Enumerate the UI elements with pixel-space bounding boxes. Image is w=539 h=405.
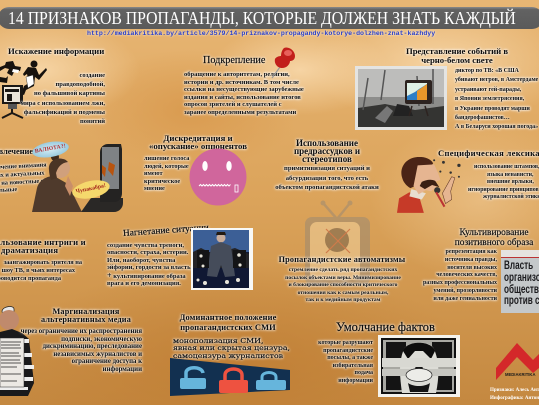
text block: которые разрушают [318, 340, 373, 346]
credits: Инфографика: Антон [490, 396, 539, 400]
logo: Mediakritika [490, 340, 539, 385]
panel: культивирование позитивного образа [420, 226, 539, 313]
title bar: 14 ПРИЗНАКОВ ПРОПАГАНДЫ, КОТОРЫЕ ДОЛЖЕН ЗНАТЬ КАЖДЫЙ [8, 8, 516, 28]
image: gagged face [378, 335, 460, 397]
text block [274, 164, 381, 192]
text block: издания и сайты, использование итогов [184, 94, 301, 101]
text block: создание чувства тревоги, [107, 242, 184, 249]
text block: источника правды, [445, 257, 497, 263]
text block [466, 162, 539, 202]
text block: опасности, страха, истерии. [107, 249, 188, 256]
heading: стереотипов [302, 154, 352, 164]
text block: пропагандистские [323, 348, 373, 354]
text block: А в Беларуси хорошая погода» [455, 124, 538, 130]
credits [490, 387, 539, 402]
heading: Специфическая лексика [438, 148, 539, 158]
heading [453, 226, 535, 248]
panel: специфическая лексика [397, 148, 539, 213]
text block: примитивизация ситуаций и [284, 165, 370, 172]
text block: диктор по ТВ: «В США [455, 68, 519, 74]
newspaper headline [504, 258, 539, 307]
panel: умолчание фактов [300, 315, 465, 405]
text block [182, 70, 306, 118]
heading: «опускание» оппонентов [149, 141, 247, 151]
text block: самоцензура журналистов [173, 352, 283, 360]
text block: человеческих качеств, [436, 272, 497, 278]
text block: умений, прозорливости [434, 288, 497, 294]
text block: создание [79, 72, 105, 79]
photo: man on dark throne [191, 228, 253, 290]
text block [142, 154, 192, 192]
photo: woman at computer [32, 144, 123, 212]
text block: так и к медийным продуктам [305, 297, 380, 303]
text block: людей, которые [144, 162, 189, 170]
heading [39, 306, 133, 326]
heading: Представление событий в [406, 46, 508, 56]
panel: пропагандистские автоматизмы [270, 250, 430, 325]
text block: носителя высоких [447, 265, 497, 271]
text block: истории и др. источникам. В том числе [184, 79, 299, 86]
text block: подписки, экономическую [61, 336, 142, 343]
icon: watermark TV with crossed brain [305, 200, 370, 285]
text block: критическое [144, 178, 180, 184]
heading: Использование [296, 138, 358, 148]
heading: Умолчание фактов [336, 320, 435, 334]
text block: в Украине проводят марши [455, 106, 530, 112]
panel: нагнетание ситуации [105, 222, 253, 290]
heading: Подкрепление [203, 55, 265, 66]
text block: заангажировать зрителя на [4, 259, 82, 266]
panel: интрига и драматизация [0, 237, 88, 284]
text block: абсурдизация того, что есть [286, 174, 368, 182]
text block: независимых журналистов и [53, 351, 142, 358]
panel: искажение информации [0, 46, 107, 126]
photo: TV in a field [355, 66, 447, 130]
heading [404, 46, 510, 66]
panel: черно-белое представление событий [355, 46, 539, 132]
text block: ограничение доступа к [72, 358, 142, 365]
text block: дискриминацию, преследование [43, 343, 142, 350]
text block: информации [338, 378, 373, 384]
heading: черно-белом свете [421, 55, 493, 65]
source link: http://mediakritika.by/article/3579/14-priznakov-propagandy-kotorye-dolzhen-znat-kazhdyy [87, 30, 435, 37]
panel: доминантное положение [170, 312, 291, 396]
text block: разных профессиональных [423, 280, 497, 286]
text block: мнение [144, 185, 165, 192]
text block: обращение к авторитетам, религии, [184, 71, 290, 78]
panel: привлечение внимания [0, 142, 123, 212]
speech bubble: yellow: Чупакабра! [75, 183, 106, 195]
heading: Культивирование [459, 228, 528, 238]
text block: внешние ярлыки, [487, 179, 534, 185]
heading [0, 237, 88, 257]
text block: в Японии землетрясения, [455, 96, 524, 102]
text block: заранее определенными результатами [184, 109, 296, 116]
text block: избирательная [333, 363, 373, 369]
speech bubble: yellow [71, 177, 111, 202]
panel: маргинализация альтернативных медиа [0, 306, 144, 396]
text block: использование штампов, [474, 164, 539, 170]
heading: Пропагандистские автоматизмы [279, 255, 405, 264]
heading: альтернативных медиа [41, 315, 131, 324]
photo: man in striped prison uniform [0, 306, 34, 396]
text block: фальсификаций и подмены [24, 109, 105, 116]
text block: посылы, а также [327, 355, 373, 361]
panel: дискредитация [142, 133, 248, 206]
text block: журналистской этики [483, 194, 539, 200]
icon: red zigzag [490, 340, 539, 382]
text block: игнорирование принципов [468, 187, 539, 193]
text block: Или, наоборот, чувства [107, 257, 175, 264]
text block: убивают негров, в Амстердаме [455, 77, 538, 83]
heading [148, 133, 248, 152]
heading [178, 312, 278, 334]
panel: подкрепление [182, 48, 306, 118]
text block: бандерофашистов… [455, 115, 510, 121]
panel: предрассудки и стереотипы [274, 138, 381, 192]
text block [18, 327, 144, 374]
speech bubble: blue: ВАЛЮТА?! [34, 143, 66, 155]
text block: языка ненависти, [487, 172, 533, 178]
text block: или даже гениальности [433, 296, 497, 302]
text block: эйфории, гордости за власть, [107, 264, 192, 271]
text block: понятий [80, 118, 105, 125]
icon: red push pin [272, 48, 295, 78]
text block: отношения как к самым реальным, [298, 290, 388, 296]
text block [270, 267, 416, 304]
text block [18, 72, 107, 126]
heading: Нагнетание ситуации [123, 222, 209, 238]
newspaper headline: Власть [504, 258, 533, 272]
text block: подача [355, 370, 373, 376]
text block: и блокирование способности критического [289, 282, 397, 288]
photo: newspaper clipping [501, 250, 539, 313]
icon: shouting man with microphone [397, 157, 461, 213]
text block [318, 340, 373, 386]
image: row of padlocks [170, 358, 290, 396]
heading: предрассудков и [294, 146, 360, 156]
heading: Искажение информации [8, 46, 104, 56]
logo text: MEDIAKRITIKA [505, 372, 535, 377]
text block: но фальшивой картины [34, 90, 105, 97]
text block [0, 161, 48, 196]
text block: через ограничение их распространения [21, 328, 142, 335]
text block: имеют [144, 170, 163, 177]
icon: zipped mouth face [190, 148, 246, 206]
text block: опросов зрителей и слушателей с [184, 101, 282, 108]
text block: шоу ТВ, в чьих интересах [2, 267, 75, 274]
text block: устраивают гей-парады, [455, 87, 521, 93]
text block: мира с использованием лжи, [21, 100, 105, 107]
text block: ссылки на несуществующие зарубежные [184, 86, 304, 93]
text block [105, 242, 192, 288]
heading: позитивного образа [455, 238, 533, 248]
text block: явная или скрытая цензура, [173, 344, 290, 352]
speech bubble: blue [31, 139, 70, 160]
heading: драматизация [1, 245, 58, 255]
text block: посылок объектами веры. Минимизирование [285, 274, 401, 280]
text block [453, 66, 539, 132]
heading: Маргинализация [52, 307, 120, 316]
text block: информации [103, 366, 142, 373]
text block: врага и его демонизация. [107, 280, 181, 287]
icon: running figures and office chair [0, 60, 47, 119]
text block: лишение голоса [144, 155, 189, 162]
newspaper headline: обществ [504, 282, 539, 296]
text block: стремление сделать ряд пропагандистских [289, 267, 397, 273]
text block: + культивирование образа [107, 271, 186, 280]
newspaper headline: против с [504, 293, 539, 307]
text block: репрезентация как [446, 249, 497, 255]
text block: объектом пропагандистской атаки [275, 184, 379, 191]
heading: Дискредитация и [163, 133, 233, 143]
heading: Доминантное положение [180, 313, 276, 322]
text block: правдоподобной, [56, 81, 105, 88]
heading: пропагандистских СМИ [180, 323, 276, 332]
text block [0, 258, 84, 284]
text block [173, 338, 290, 360]
text block: монополизация СМИ, [173, 337, 263, 345]
text block [420, 248, 499, 303]
heading [292, 138, 362, 166]
